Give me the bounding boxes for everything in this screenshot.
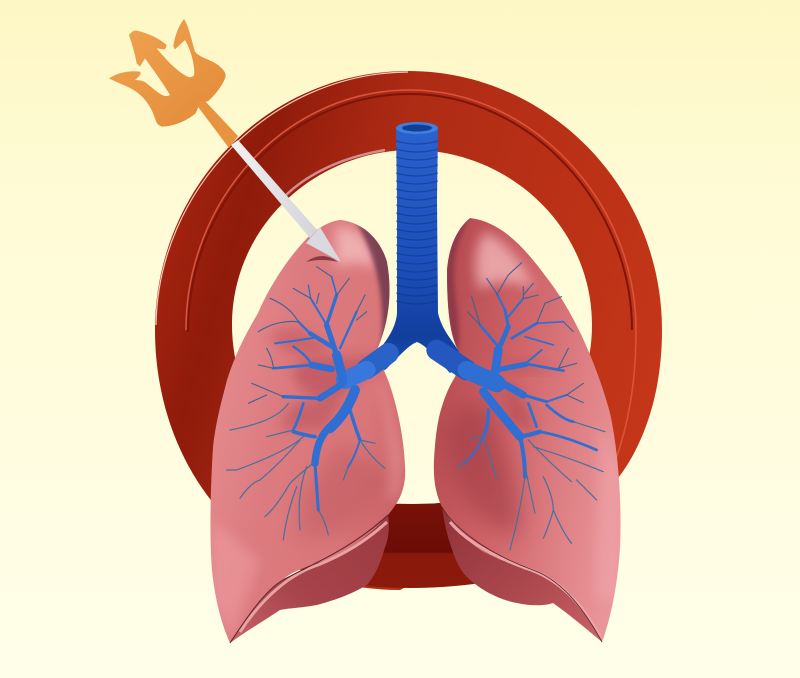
left lung body [210,220,405,643]
right lung [434,216,625,642]
right lung lower flap [442,507,602,642]
trident head [109,19,226,127]
right bronchial tree, upper [437,263,583,403]
arrow head [306,227,341,262]
trident arrow [109,19,341,262]
trident handle [197,101,238,148]
trachea rings [396,141,438,304]
trachea opening [396,122,438,134]
left lung crease under arrow [306,256,338,262]
trident fork [109,19,238,148]
right bronchial tree, lower [457,392,605,550]
arrow shaft [231,140,317,238]
ring bottom band [320,498,500,588]
right lung flap edge [450,522,600,636]
trachea [375,122,460,373]
left lung [210,220,406,643]
ring [155,71,662,590]
left bronchial tree, lower [227,390,385,540]
left bronchial tree, upper [248,267,388,403]
right lung shading [445,216,625,600]
left lung lower flap [230,515,389,643]
left lung shading [210,222,406,640]
right lung body [434,218,621,642]
left lung flap edge [240,522,387,632]
